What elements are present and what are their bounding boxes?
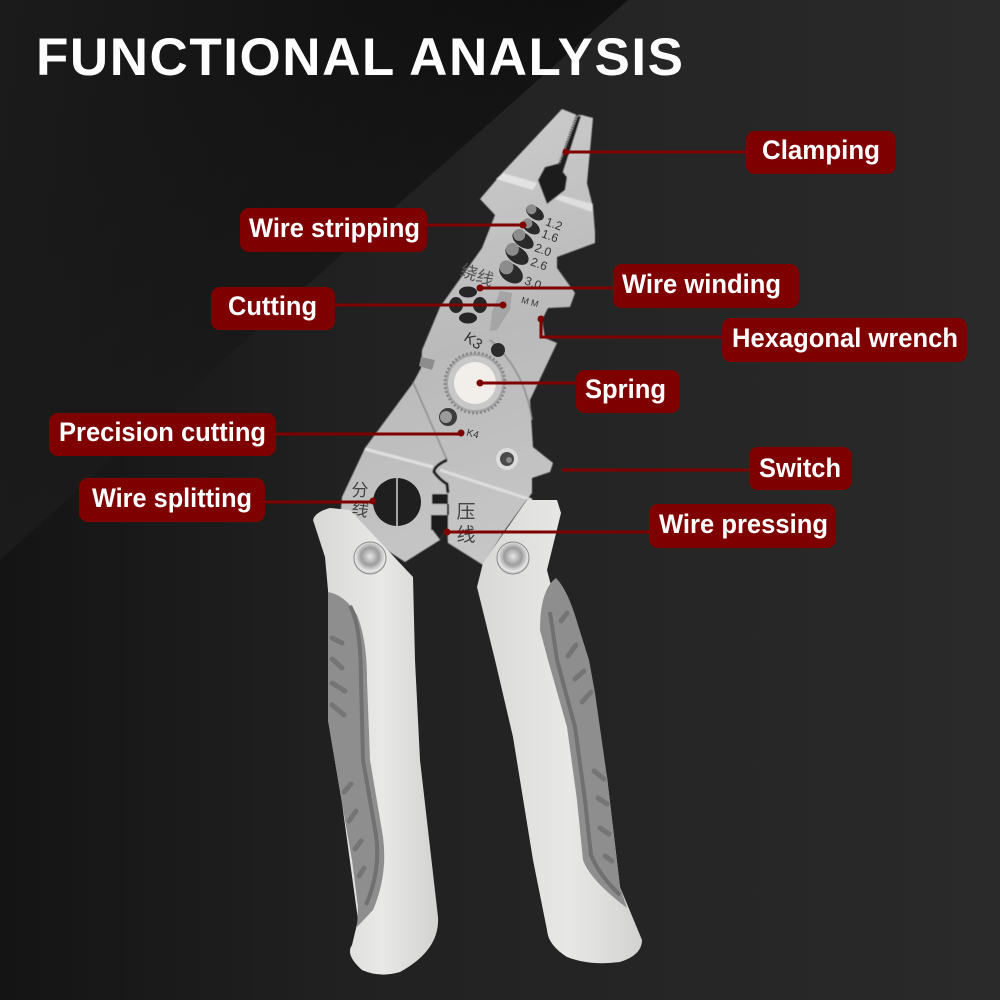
label: Wire stripping: Wire stripping <box>249 213 420 243</box>
label: Wire winding <box>476 264 799 308</box>
engraved characters: 分 <box>352 481 368 500</box>
label: Precision cutting <box>49 413 464 456</box>
label: Hexagonal wrench <box>538 316 967 362</box>
label: Wire pressing <box>444 504 836 548</box>
pliers illustration <box>313 109 642 975</box>
label: Clamping: Clamping <box>762 135 880 165</box>
label: Spring: Spring <box>585 374 666 404</box>
label: Clamping <box>562 131 896 174</box>
clover cutting holes <box>449 286 487 324</box>
right grip ribs <box>561 613 612 861</box>
label: Cutting <box>211 287 506 330</box>
teeth gap <box>431 460 448 543</box>
label: Switch: Switch <box>759 453 841 483</box>
engraved characters <box>349 481 476 546</box>
label: Wire splitting <box>79 478 376 522</box>
engraved characters: 压 <box>456 502 476 523</box>
left grip ribs <box>332 638 364 876</box>
cutting notch <box>490 291 512 331</box>
gauge numbers: K4 <box>465 428 480 441</box>
stripping holes <box>494 202 547 288</box>
label: Cutting: Cutting <box>228 291 317 321</box>
gauge numbers: 绕线 <box>458 261 496 290</box>
right handle rivet <box>497 542 529 574</box>
label: Switch <box>562 447 852 490</box>
steel head <box>340 109 595 565</box>
label: Wire stripping <box>240 208 526 252</box>
jaw gap and opening <box>538 116 581 204</box>
label: Wire splitting: Wire splitting <box>92 483 252 513</box>
label: Wire pressing: Wire pressing <box>659 509 828 539</box>
left grip <box>328 592 384 927</box>
engraved characters: 线 <box>456 524 476 546</box>
label: Wire winding: Wire winding <box>622 269 781 299</box>
gauge numbers: 1.2 <box>544 215 565 234</box>
left handle <box>313 508 438 975</box>
label: Hexagonal wrench: Hexagonal wrench <box>732 323 958 353</box>
label: Spring <box>476 370 680 413</box>
right handle <box>477 500 642 963</box>
gauge numbers: K3 <box>461 329 486 353</box>
spring rivet <box>445 353 505 413</box>
engraved characters: 线 <box>349 498 371 521</box>
crease highlights <box>496 173 537 190</box>
label: Precision cutting: Precision cutting <box>59 417 266 447</box>
wire splitting hole <box>373 478 421 526</box>
title: FUNCTIONAL ANALYSIS <box>36 28 683 87</box>
small holes <box>419 343 518 470</box>
gauge numbers: 1.6 <box>540 227 561 246</box>
gauge numbers <box>458 215 565 441</box>
left handle rivet <box>354 542 386 574</box>
gauge numbers: 2.6 <box>529 255 550 274</box>
right grip <box>540 578 627 908</box>
gauge numbers: M M <box>520 295 540 309</box>
gauge numbers: 2.0 <box>533 241 554 260</box>
gauge numbers: 3.0 <box>523 274 544 293</box>
